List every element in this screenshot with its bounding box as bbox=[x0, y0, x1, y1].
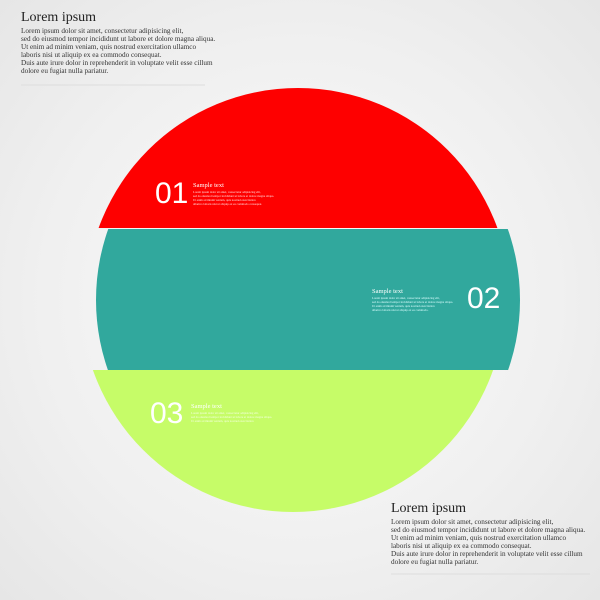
text block: top left: laboris nisi ut aliquip ex ea commodo consequat. bbox=[21, 51, 162, 59]
segment 03: 03 bbox=[150, 397, 183, 430]
text block: top left: Lorem ipsum dolor sit amet, consectetur adipisicing elit, bbox=[21, 27, 183, 35]
text block: bottom right: Lorem ipsum bbox=[391, 501, 466, 516]
segment 02: Lorem ipsum dolor sit amet, consectetur adipisicing elit, bbox=[372, 296, 440, 301]
text block: bottom right bbox=[391, 501, 585, 566]
text block: bottom right: Lorem ipsum dolor sit amet, consectetur adipisicing elit, bbox=[391, 518, 553, 526]
segment 02: sed do eiusmod tempor incididunt ut labore et dolore magna aliqua. bbox=[372, 300, 453, 304]
segment 03: Sample text bbox=[191, 403, 222, 410]
text block: top left: dolore eu fugiat nulla pariatur. bbox=[21, 67, 108, 75]
segment 01: Lorem ipsum dolor sit amet, consectetur adipisicing elit, bbox=[193, 190, 261, 195]
text block: bottom right: dolore eu fugiat nulla pariatur. bbox=[391, 558, 478, 566]
segment 01: ullamco laboris nisi ut aliquip ex ea commodo consequat. bbox=[193, 202, 262, 206]
text block: bottom right: Duis aute irure dolor in reprehenderit in voluptate velit esse cillum bbox=[391, 550, 583, 558]
text block: top left: Ut enim ad minim veniam, quis nostrud exercitation ullamco bbox=[21, 43, 196, 51]
segment 03: sed do eiusmod tempor incididunt ut labore et dolore magna aliqua. bbox=[191, 415, 272, 419]
segment 01 bbox=[98, 88, 498, 228]
segment 02 bbox=[96, 229, 520, 370]
segment 01: sed do eiusmod tempor incididunt ut labore et dolore magna aliqua. bbox=[193, 194, 274, 198]
text block: top left: sed do eiusmod tempor incididunt ut labore et dolore magna aliqua. bbox=[21, 35, 215, 43]
text block: top left: Duis aute irure dolor in reprehenderit in voluptate velit esse cillum bbox=[21, 59, 213, 67]
segment 03: Ut enim ad minim veniam, quis nostrud exercitation bbox=[191, 419, 254, 424]
text block: top left: Lorem ipsum bbox=[21, 10, 96, 25]
circle diagram bbox=[21, 84, 590, 574]
segment 02: ullamco laboris nisi ut aliquip ex ea commodo. bbox=[372, 308, 429, 312]
text block: bottom right: Ut enim ad minim veniam, quis nostrud exercitation ullamco bbox=[391, 534, 566, 542]
segment 01: Sample text bbox=[193, 182, 224, 189]
text block: bottom right: sed do eiusmod tempor incididunt ut labore et dolore magna aliqua. bbox=[391, 526, 585, 534]
segment 02: Sample text bbox=[372, 288, 403, 295]
text block: bottom right: laboris nisi ut aliquip ex ea commodo consequat. bbox=[391, 542, 532, 550]
text block: top left bbox=[21, 10, 215, 75]
segment 03: Lorem ipsum dolor sit amet, consectetur adipisicing elit, bbox=[191, 411, 259, 416]
segment 01: 01 bbox=[155, 177, 188, 210]
segment 03 bbox=[92, 370, 494, 512]
segment 01: Ut enim ad minim veniam, quis nostrud exercitation bbox=[193, 198, 256, 203]
segment 02: 02 bbox=[467, 282, 500, 315]
segment 02: Ut enim ad minim veniam, quis nostrud exercitation bbox=[372, 304, 435, 309]
